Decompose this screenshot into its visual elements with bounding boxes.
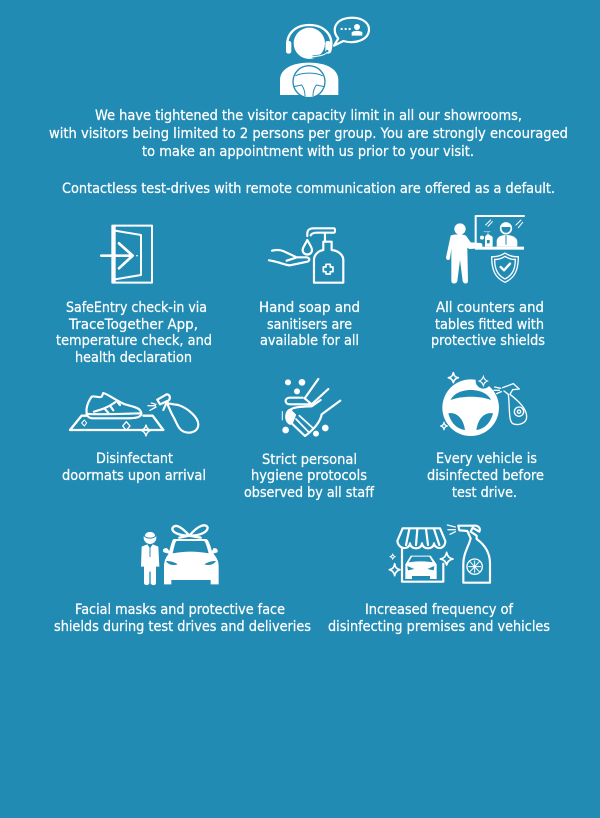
caption: hygiene protocols bbox=[244, 452, 374, 501]
caption: vehicle disinfected: test drive. bbox=[452, 485, 517, 501]
caption: facial masks bbox=[54, 602, 311, 635]
caption: counters and tables: All counters and bbox=[436, 300, 544, 316]
caption: facial masks: shields during test drives and deliveries bbox=[54, 619, 311, 635]
caption: hygiene protocols: Strict personal bbox=[262, 452, 357, 468]
intro text block: Contactless test-drives with remote communication are offered as a default. bbox=[62, 181, 555, 197]
caption: counters and tables: tables fitted with bbox=[435, 317, 544, 333]
icon: hand and soap dispenser bbox=[269, 228, 343, 283]
intro text block: with visitors being limited to 2 persons per group. You are strongly encouraged bbox=[49, 126, 568, 142]
caption: premises disinfecting: Increased frequency of bbox=[365, 602, 514, 618]
icon: door check-in bbox=[101, 225, 152, 283]
caption: hygiene protocols: observed by all staff bbox=[244, 485, 374, 501]
caption: doormats: Disinfectant bbox=[96, 451, 173, 467]
caption: hand soap: available for all bbox=[260, 333, 359, 349]
caption: SafeEntry check-in: health declaration bbox=[75, 350, 192, 366]
icon: hand washing bbox=[282, 379, 340, 437]
caption: SafeEntry check-in: temperature check, and bbox=[56, 333, 212, 349]
intro text block: to make an appointment with us prior to your visit. bbox=[142, 144, 474, 160]
caption: hand soap: Hand soap and bbox=[259, 300, 360, 316]
intro text block bbox=[49, 108, 568, 197]
icon: call agent with steering wheel bbox=[280, 18, 369, 98]
caption: counters and tables bbox=[431, 300, 545, 349]
caption: hand soap: sanitisers are bbox=[267, 317, 352, 333]
icon: shoe on disinfectant doormat bbox=[70, 393, 198, 436]
caption: premises disinfecting bbox=[328, 602, 550, 635]
intro text block: We have tightened the visitor capacity limit in all our showrooms, bbox=[95, 108, 522, 124]
caption: premises disinfecting: disinfecting premises and vehicles bbox=[328, 619, 550, 635]
icon: showroom and spray bottle bbox=[389, 525, 490, 583]
caption: vehicle disinfected: Every vehicle is bbox=[436, 451, 537, 467]
caption: vehicle disinfected bbox=[427, 451, 544, 501]
caption: facial masks: Facial masks and protective face bbox=[75, 602, 285, 618]
icon: staff and car with bow bbox=[141, 525, 219, 585]
caption: hygiene protocols: hygiene protocols bbox=[251, 468, 367, 484]
icon: steering wheel and spray bbox=[441, 373, 527, 436]
caption: SafeEntry check-in: SafeEntry check-in via bbox=[66, 300, 207, 316]
caption: doormats: doormats upon arrival bbox=[62, 468, 206, 484]
icon: counter with protective shield bbox=[446, 216, 524, 283]
caption: doormats bbox=[62, 451, 206, 484]
caption: hand soap bbox=[259, 300, 360, 349]
caption: SafeEntry check-in: TraceTogether App, bbox=[68, 317, 198, 333]
caption: counters and tables: protective shields bbox=[431, 333, 545, 349]
caption: SafeEntry check-in bbox=[56, 300, 212, 366]
caption: vehicle disinfected: disinfected before bbox=[427, 468, 544, 484]
